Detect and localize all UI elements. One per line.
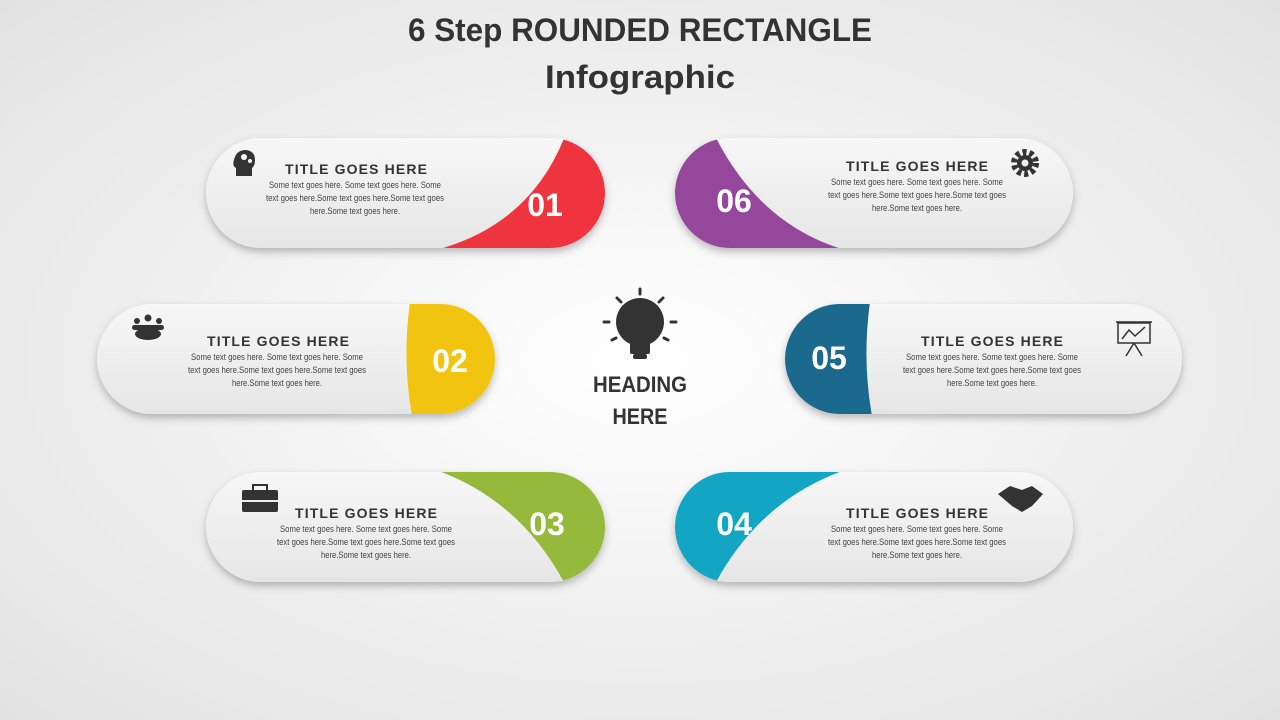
icon: briefcase <box>242 485 278 512</box>
panel: step 03: here.Some text goes here. <box>321 550 411 560</box>
panel: step 04: text goes here.Some text goes here.Some text goes <box>828 537 1006 547</box>
panel: step 02 <box>97 302 500 416</box>
panel: step 05: 05 <box>811 340 847 376</box>
panel: step 02: 02 <box>432 343 468 379</box>
panel: step 06: text goes here.Some text goes here.Some text goes <box>828 190 1006 200</box>
panel: step 02: text goes here.Some text goes here.Some text goes <box>188 365 366 375</box>
panel: step 01: here.Some text goes here. <box>310 206 400 216</box>
heading: HERE <box>612 404 668 429</box>
panel: step 06: here.Some text goes here. <box>872 203 962 213</box>
panel: step 03: Some text goes here. Some text goes here. Some <box>280 524 452 534</box>
panel: step 04: Some text goes here. Some text goes here. Some <box>831 524 1003 534</box>
panel: step 04 <box>660 470 1073 584</box>
panel: step 04: 04 <box>716 506 752 542</box>
panel: step 06 <box>660 136 1073 250</box>
panel: step 01: text goes here.Some text goes here.Some text goes <box>266 193 444 203</box>
panel: step 05: text goes here.Some text goes here.Some text goes <box>903 365 1081 375</box>
panel: step 04: TITLE GOES HERE <box>846 505 988 521</box>
panel: step 05: TITLE GOES HERE <box>921 333 1063 349</box>
panel: step 04: here.Some text goes here. <box>872 550 962 560</box>
title: 6 Step ROUNDED RECTANGLE <box>408 12 872 48</box>
panel: step 02: here.Some text goes here. <box>232 378 322 388</box>
heading: HEADING <box>593 372 687 397</box>
panel: step 06: 06 <box>716 183 752 219</box>
panel: step 03: text goes here.Some text goes here.Some text goes <box>277 537 455 547</box>
title: Infographic <box>545 59 735 95</box>
panel: step 02: TITLE GOES HERE <box>207 333 349 349</box>
icon: gear <box>1014 152 1036 174</box>
panel: step 01 <box>206 136 620 250</box>
panel: step 05 <box>770 302 1182 416</box>
panel: step 03: 03 <box>529 506 565 542</box>
panel: step 02: Some text goes here. Some text goes here. Some <box>191 352 363 362</box>
panel: step 06: Some text goes here. Some text goes here. Some <box>831 177 1003 187</box>
heading <box>593 372 687 429</box>
panel: step 01: TITLE GOES HERE <box>285 161 427 177</box>
panel: step 05: here.Some text goes here. <box>947 378 1037 388</box>
title <box>408 12 872 95</box>
icon: head gears <box>233 150 255 176</box>
icon: light bulb <box>604 289 676 359</box>
panel: step 03 <box>206 470 620 584</box>
panel: step 01: 01 <box>527 187 563 223</box>
icon: presentation board <box>1116 322 1152 356</box>
panel: step 05: Some text goes here. Some text goes here. Some <box>906 352 1078 362</box>
icon: team <box>132 314 164 340</box>
icon: handshake <box>998 486 1043 512</box>
panel: step 03: TITLE GOES HERE <box>295 505 437 521</box>
panel: step 06: TITLE GOES HERE <box>846 158 988 174</box>
panel: step 01: Some text goes here. Some text goes here. Some <box>269 180 441 190</box>
